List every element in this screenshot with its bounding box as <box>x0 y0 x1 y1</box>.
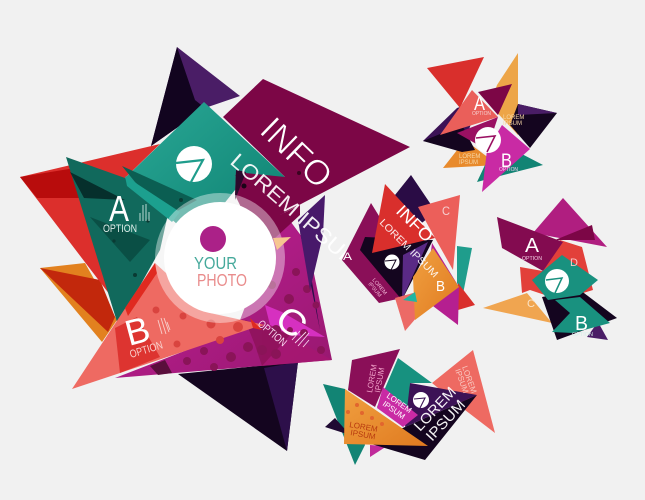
orange left triangle <box>40 263 117 342</box>
dark panel <box>360 237 433 300</box>
purple facet <box>402 242 428 300</box>
salmon panel C <box>418 195 460 270</box>
teal back panel <box>377 358 432 427</box>
mini label A: A <box>474 94 485 115</box>
mini lorem on maroon: LOREM <box>370 277 388 297</box>
mini labels <box>343 204 450 295</box>
photo label: PHOTO <box>197 270 247 290</box>
option A: A <box>109 188 129 229</box>
mini labels: B <box>575 313 588 335</box>
mini labels: A <box>343 251 353 263</box>
mini labels: OPTION <box>522 256 542 262</box>
halo ring <box>155 193 285 323</box>
magenta small shard <box>370 445 387 457</box>
maroon panel A <box>342 203 402 303</box>
photo circle <box>164 202 276 314</box>
mini labels: OPTION <box>572 332 593 338</box>
lorem ipsum heading: LOREM IPSUM <box>226 149 364 274</box>
faint lorem labels: LOREM <box>349 420 379 434</box>
red panel <box>520 240 593 300</box>
mini pie icon <box>413 392 429 408</box>
mini lorem labels: LOREM <box>459 154 480 160</box>
mini label B: B <box>501 151 512 172</box>
option C: C <box>268 297 315 347</box>
faint lorem labels: IPSUM <box>350 428 376 441</box>
top right mini cluster <box>423 53 557 192</box>
dark teal panel <box>66 157 197 325</box>
orange triangle <box>483 293 552 323</box>
purple panel <box>405 383 477 427</box>
mini pie icon <box>545 269 569 293</box>
mini labels: B <box>436 278 445 295</box>
maroon triangle <box>478 84 512 115</box>
lorem ipsum on magenta <box>381 391 414 421</box>
mini labels: A <box>525 235 540 257</box>
option C: OPTION <box>255 318 289 349</box>
centre mini cluster <box>342 175 475 331</box>
maroon panel <box>348 349 400 407</box>
pie icon <box>176 146 212 182</box>
maroon panel <box>497 217 563 271</box>
mini labels: D <box>570 257 578 269</box>
mini labels: C <box>442 204 450 218</box>
mini lorem on maroon: IPSUM <box>366 281 383 299</box>
faint lorem labels: LOREM <box>365 363 379 393</box>
option B: OPTION <box>128 339 164 361</box>
teal panels <box>532 255 610 333</box>
option B <box>120 308 170 361</box>
faint lorem labels: IPSUM <box>453 368 470 395</box>
maroon and dark centre wedge <box>235 170 301 250</box>
mini label A: OPTION <box>472 111 491 117</box>
mini pie icon <box>475 127 501 153</box>
salmon bottom triangle <box>395 293 423 331</box>
red left triangle <box>20 144 160 295</box>
lorem ipsum on magenta: LOREM <box>385 391 414 415</box>
main infographic cluster <box>20 47 410 451</box>
purple corner <box>587 322 608 340</box>
teal top panel <box>125 102 285 240</box>
black panel <box>542 290 617 340</box>
faint lorem labels: LOREM <box>460 365 478 395</box>
info heading: INFO <box>252 110 340 196</box>
magenta top triangle <box>533 198 607 247</box>
dark shards <box>423 100 557 152</box>
lorem ipsum large <box>411 384 469 445</box>
purple strip behind lorem ipsum <box>298 195 325 290</box>
lorem ipsum on magenta: IPSUM <box>381 399 407 421</box>
mini lorem labels: IPSUM <box>459 160 478 166</box>
magenta shard <box>425 243 459 325</box>
magenta lower panel <box>115 210 332 378</box>
orange panel <box>344 389 428 446</box>
orange shards <box>443 53 518 168</box>
maroon band <box>555 225 595 240</box>
mini teal wedge <box>403 292 417 302</box>
salmon triangle <box>432 350 495 433</box>
option A <box>103 188 149 235</box>
option B: B <box>120 308 154 354</box>
small orange pointer <box>273 237 291 250</box>
teal shard <box>477 152 543 182</box>
mini info text: INFO <box>392 201 437 246</box>
mini labels: C <box>527 298 535 310</box>
mini label B <box>499 151 518 173</box>
dark purple back triangle <box>151 47 240 146</box>
black panel <box>368 395 477 460</box>
red triangle <box>427 57 484 108</box>
orange panel <box>413 248 459 320</box>
mini pie icon <box>384 254 400 270</box>
salmon lower panel <box>72 263 265 389</box>
red panel <box>372 184 435 253</box>
right mini cluster <box>483 198 617 340</box>
salmon panel <box>440 90 498 135</box>
dark top triangle <box>395 175 436 232</box>
option A: OPTION <box>103 223 137 235</box>
mini lorem ipsum text: LOREM IPSUM <box>377 217 440 280</box>
maroon band <box>457 117 498 150</box>
lorem ipsum large: IPSUM <box>423 397 469 445</box>
magenta panel <box>482 125 530 192</box>
dark bottom triangle <box>178 362 298 451</box>
maroon info panel <box>223 79 410 215</box>
teal and red right shards <box>457 246 475 310</box>
mini label B: OPTION <box>499 167 518 173</box>
mini labels <box>522 235 593 338</box>
mini lorem labels: IPSUM <box>503 121 522 127</box>
photo placeholder dot <box>200 226 226 252</box>
faint lorem labels: IPSUM <box>373 367 386 393</box>
magenta panel <box>377 387 418 427</box>
faint lorem labels <box>349 363 478 441</box>
mini lorem labels: LOREM <box>503 115 524 121</box>
mini label A <box>472 94 491 117</box>
bottom mini cluster <box>323 349 495 465</box>
lorem ipsum large: LOREM <box>411 384 460 435</box>
teal left shard <box>323 384 365 465</box>
dark left shard <box>325 418 350 435</box>
your label: YOUR <box>194 253 237 273</box>
mini lorem labels <box>459 115 524 166</box>
